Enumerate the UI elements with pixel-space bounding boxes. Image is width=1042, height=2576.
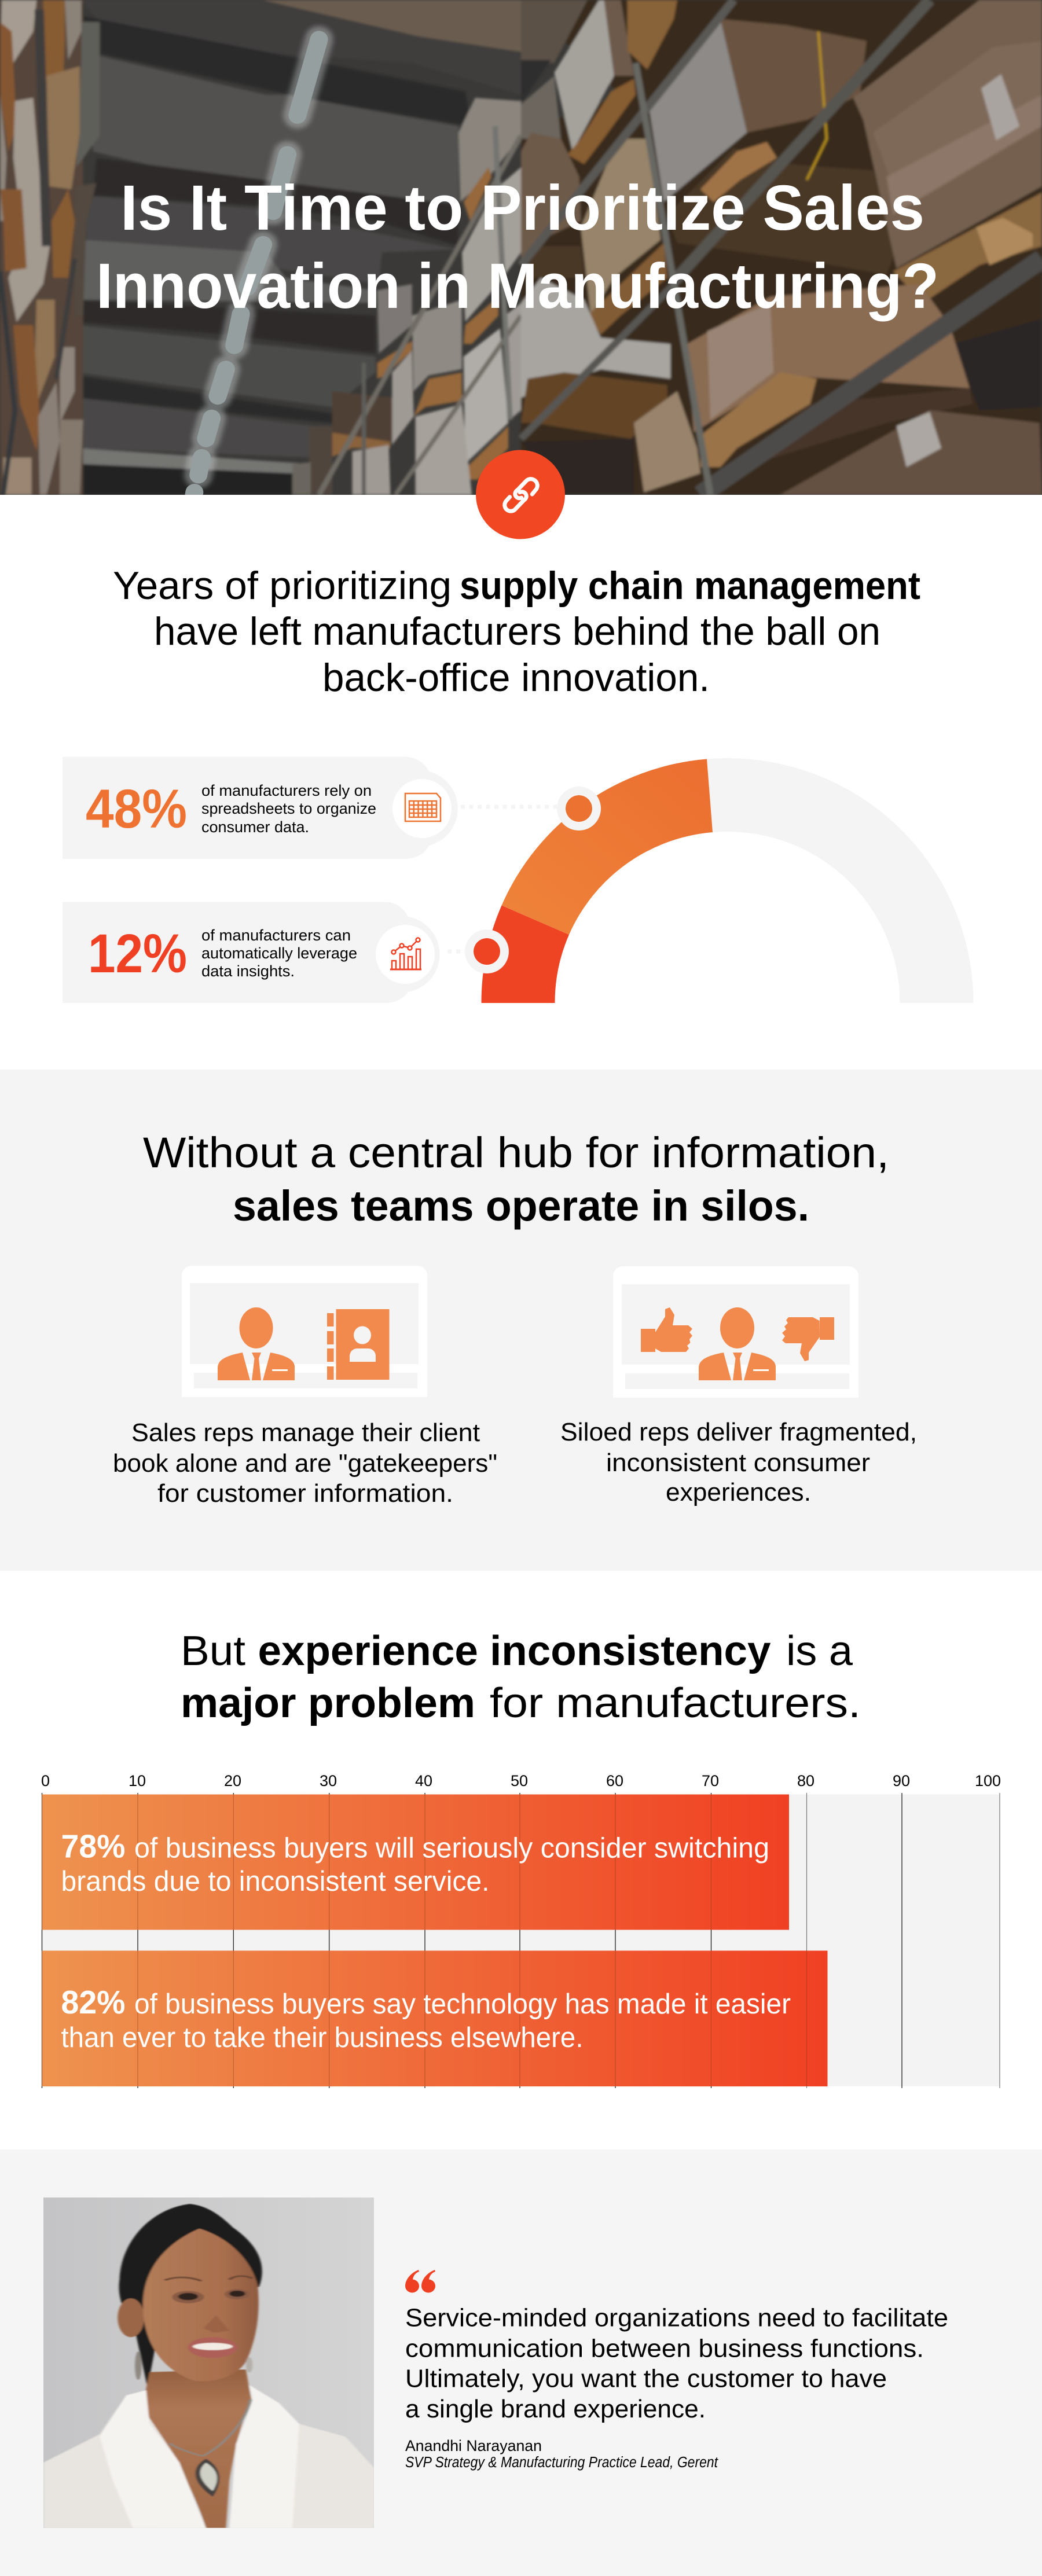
text: client book caption: [113, 1419, 497, 1508]
dotted connector 48%: [461, 804, 557, 809]
heading: experience inconsistency: major problem: [181, 1680, 475, 1726]
text: 78% switching brands: [61, 1828, 769, 1897]
gauge remainder: [707, 758, 974, 1003]
axis labels: 20: [224, 1772, 241, 1789]
chart: horizontal percentage bars: [41, 1772, 1001, 2088]
text: quote: [405, 2305, 948, 2423]
text: client book caption: Sales reps manage their client: [131, 1419, 480, 1447]
text: quote: a single brand experience.: [405, 2395, 706, 2423]
thumbs up: [641, 1307, 692, 1352]
panel: customer quote: [0, 2149, 1042, 2576]
text: 82% technology: 82%: [61, 1984, 125, 2021]
heading: silos: Without a central hub for information,: [143, 1129, 889, 1177]
text: quote: Service-minded organizations need to facilitate: [405, 2305, 948, 2332]
heading: experience inconsistency: experience inconsistency: [258, 1628, 771, 1674]
title: Innovation in Manufacturing?: [96, 251, 939, 322]
text: attribution: SVP Strategy & Manufacturing Practice Lead, Gerent: [405, 2454, 718, 2471]
chart track: [42, 1794, 1000, 2086]
axis labels: 50: [511, 1772, 528, 1789]
heading: supply chain intro: have left manufacturers behind the ball on: [154, 609, 880, 653]
axis grid lines: [42, 1793, 1000, 2088]
ceiling lights: [193, 39, 319, 499]
panel: 48% stat callout: [63, 757, 458, 859]
text: client book caption: book alone and are "gatekeepers": [113, 1449, 497, 1478]
thumbs down: [782, 1317, 834, 1361]
marker 12%: [465, 929, 509, 973]
bar 78%: [42, 1794, 789, 1930]
portrait photo illustration: [43, 2197, 374, 2528]
icon: spreadsheet: [405, 793, 441, 821]
stat number 12%: 12%: [88, 923, 187, 984]
axis labels: 60: [606, 1772, 623, 1789]
gauge segment 48%: [501, 759, 713, 935]
gauge segment 12%: [481, 905, 569, 1003]
axis labels: 80: [797, 1772, 814, 1789]
heading: supply chain intro: back-office innovation.: [322, 656, 710, 700]
title: [96, 172, 939, 322]
text: fragmented experiences caption: inconsistent consumer: [606, 1449, 870, 1477]
dotted connector 12%: [448, 949, 465, 954]
stat description 48%: of manufacturers rely on: [201, 782, 372, 799]
heading: silos: sales teams operate in silos.: [233, 1182, 809, 1230]
right side racks and boxes: [521, 0, 1042, 495]
text: client book caption: for customer information.: [157, 1479, 453, 1508]
heading: experience inconsistency: But: [181, 1628, 245, 1674]
axis labels: 30: [320, 1772, 337, 1789]
axis labels: 70: [702, 1772, 719, 1789]
text: 82% technology: than ever to take their business elsewhere.: [61, 2022, 584, 2053]
icon: quotation mark: [405, 2270, 435, 2292]
icon: rep with contact book: [182, 1266, 427, 1397]
marker 48%: [557, 787, 601, 831]
text: fragmented experiences caption: Siloed reps deliver fragmented,: [560, 1418, 917, 1446]
bar 82%: [42, 1950, 828, 2086]
heading: experience inconsistency: [181, 1628, 861, 1726]
text: 78% switching brands: of business buyers will seriously consider switching: [134, 1832, 769, 1864]
icon: rep with thumbs up and down: [613, 1266, 858, 1398]
heading: silos: [143, 1129, 889, 1230]
text: attribution: [405, 2437, 718, 2471]
axis labels: 100: [975, 1772, 1001, 1789]
text: fragmented experiences caption: experiences.: [666, 1478, 811, 1506]
text: 82% technology: [61, 1984, 791, 2053]
axis labels: 10: [129, 1772, 146, 1789]
stat description 48%: [201, 782, 376, 836]
axis labels: 90: [893, 1772, 910, 1789]
panel: sales teams operate in silos: [0, 1070, 1042, 1571]
heading: experience inconsistency: for manufacturers.: [490, 1680, 861, 1726]
icon: chain link badge: [476, 450, 565, 539]
heading: supply chain intro: supply chain management: [460, 564, 920, 608]
stat description 48%: spreadsheets to organize: [201, 800, 376, 817]
text: quote: Ultimately, you want the customer to have: [405, 2365, 887, 2393]
stat number 48%: 48%: [86, 778, 187, 840]
title: Is It Time to Prioritize Sales: [120, 172, 924, 244]
stat description 12%: of manufacturers can: [201, 927, 351, 944]
panel: hero warehouse photo with title: [0, 0, 1042, 499]
grid lines over bars: [138, 1794, 807, 2086]
heading: supply chain intro: [113, 564, 920, 700]
heading: supply chain intro: Years of prioritizing: [113, 564, 452, 608]
text: 78% switching brands: 78%: [61, 1828, 125, 1865]
icon: growth chart: [390, 938, 421, 969]
text: quote: communication between business functions.: [405, 2335, 924, 2362]
axis labels: [41, 1772, 1001, 1789]
stat description 12%: data insights.: [201, 962, 295, 980]
axis labels: 0: [41, 1772, 50, 1789]
text: fragmented experiences caption: [560, 1418, 917, 1506]
stat description 12%: automatically leverage: [201, 945, 357, 962]
warehouse photo illustration: [0, 0, 1042, 499]
text: attribution: Anandhi Narayanan: [405, 2437, 542, 2454]
stat description 12%: [201, 927, 357, 980]
ceiling and left shelves: [0, 0, 521, 495]
panel: 12% stat callout: [63, 902, 440, 1003]
chart: semicircular gauge: [448, 758, 974, 1003]
axis labels: 40: [415, 1772, 432, 1789]
text: 78% switching brands: brands due to inconsistent service.: [61, 1866, 490, 1897]
heading: experience inconsistency: is a: [786, 1628, 853, 1674]
text: 82% technology: of business buyers say technology has made it easier: [134, 1989, 791, 2020]
stat description 48%: consumer data.: [201, 818, 309, 836]
